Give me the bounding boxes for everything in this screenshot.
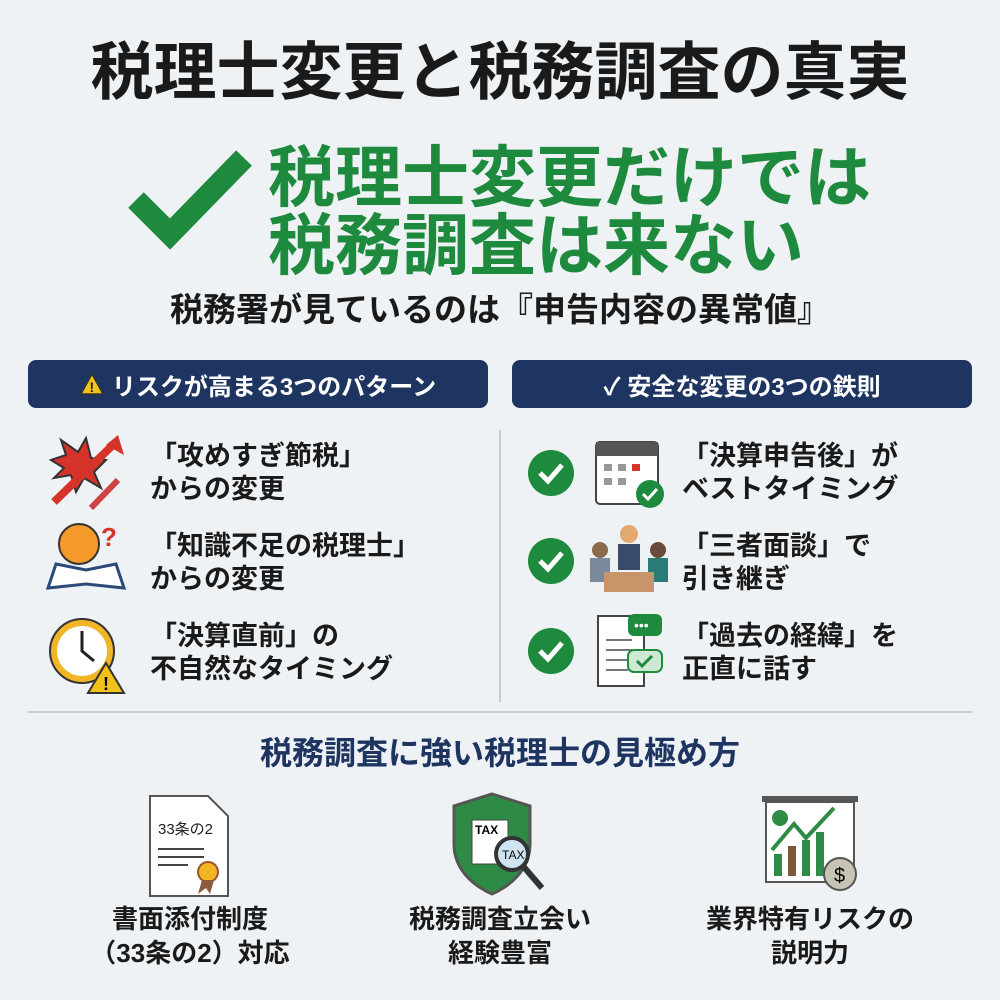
header: risk patterns bbox=[28, 360, 488, 408]
text bbox=[409, 904, 591, 968]
text: rule 3: 正直に話す bbox=[682, 654, 817, 684]
header: safe rules bbox=[512, 360, 972, 408]
icon: document chat bbox=[597, 614, 663, 687]
panel: safe rules bbox=[528, 441, 899, 687]
icon: document chat: ••• bbox=[634, 617, 649, 633]
headline: 税務調査は来ない bbox=[268, 209, 804, 284]
icon: shield tax bbox=[452, 792, 544, 896]
icon: red arrows bbox=[48, 435, 124, 510]
text: risk 3: 「決算直前」の bbox=[150, 621, 339, 651]
text: rule 3 bbox=[682, 621, 898, 684]
text: rule 2: 引き継ぎ bbox=[682, 564, 790, 594]
text: 説明力 bbox=[771, 938, 849, 968]
icon: document certificate: 33条の2 bbox=[158, 821, 213, 838]
icon: shield tax: TAX bbox=[475, 823, 498, 837]
icon: calendar bbox=[595, 441, 664, 508]
header: safe rules: ✓ 安全な変更の3つの鉄則 bbox=[603, 374, 881, 400]
text: （33条の2）対応 bbox=[90, 938, 290, 968]
icon: big checkmark bbox=[128, 150, 252, 250]
text: risk 3: 不自然なタイミング bbox=[150, 654, 393, 684]
text: rule 3: 「過去の経緯」を bbox=[682, 621, 898, 651]
text: risk 2: 「知識不足の税理士」 bbox=[150, 531, 420, 561]
text: rule 2 bbox=[682, 531, 871, 594]
headline bbox=[268, 141, 871, 284]
text: risk 1: からの変更 bbox=[150, 474, 285, 504]
icon: clock warning bbox=[49, 618, 126, 694]
icon: clock warning: ! bbox=[103, 674, 109, 694]
text: 業界特有リスクの bbox=[706, 904, 914, 934]
text: rule 2: 「三者面談」で bbox=[682, 531, 871, 561]
criterion 1 bbox=[90, 795, 290, 968]
criterion 3 bbox=[706, 796, 914, 968]
icon: document certificate bbox=[149, 795, 229, 897]
text bbox=[90, 904, 290, 968]
check 3 bbox=[528, 628, 574, 674]
headline: 税理士変更だけでは bbox=[268, 141, 871, 216]
text: rule 1: 「決算申告後」が bbox=[682, 441, 898, 471]
text: rule 1 bbox=[682, 441, 899, 504]
panel: criteria bbox=[90, 792, 914, 968]
criterion 2 bbox=[409, 792, 591, 968]
icon: thinking face bbox=[46, 522, 126, 590]
text: risk 3 bbox=[150, 621, 393, 684]
text: 経験豊富 bbox=[448, 938, 552, 968]
header: risk patterns: ! bbox=[89, 379, 94, 395]
header: risk patterns: リスクが高まる3つのパターン bbox=[112, 374, 436, 400]
icon: meeting bbox=[590, 525, 668, 592]
icon: thinking face: ? bbox=[101, 522, 117, 552]
text: 書面添付制度 bbox=[112, 904, 268, 934]
section heading: 税務調査に強い税理士の見極め方 bbox=[260, 735, 740, 771]
icon: chart board: $ bbox=[834, 865, 845, 887]
text: risk 2 bbox=[150, 531, 420, 594]
title: 税理士変更と税務調査の真実 bbox=[90, 38, 910, 108]
text: risk 2: からの変更 bbox=[150, 564, 285, 594]
icon: shield tax: TAX bbox=[502, 848, 524, 862]
panel: risk patterns bbox=[46, 435, 420, 694]
subtitle: 税務署が見ているのは『申告内容の異常値』 bbox=[170, 291, 830, 328]
check 2 bbox=[528, 538, 574, 584]
text: risk 1 bbox=[150, 441, 366, 504]
text bbox=[706, 904, 914, 968]
text: 税務調査立会い bbox=[409, 904, 591, 934]
text: rule 1: ベストタイミング bbox=[682, 474, 899, 504]
icon: chart board bbox=[762, 796, 858, 891]
text: risk 1: 「攻めすぎ節税」 bbox=[150, 441, 366, 471]
check 1 bbox=[528, 450, 574, 496]
